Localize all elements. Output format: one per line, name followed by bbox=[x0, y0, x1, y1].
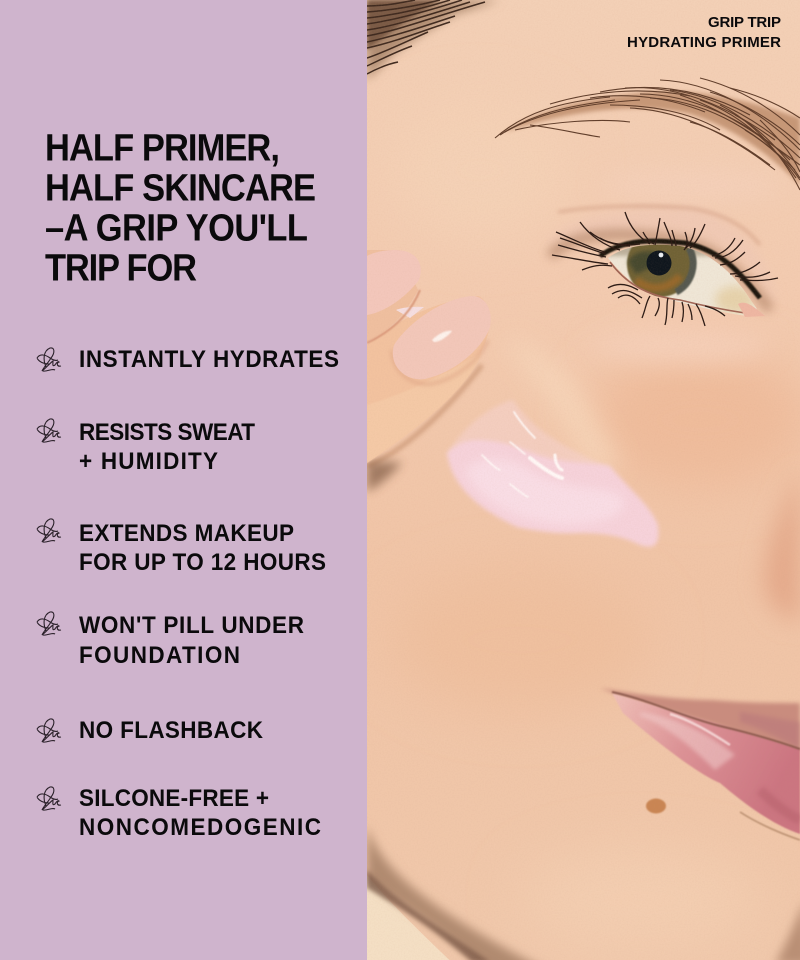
hair bbox=[367, 0, 500, 80]
benefit: resists sweat and humidity: + HUMIDITY bbox=[79, 447, 219, 474]
benefit: silicone-free: NONCOMEDOGENIC bbox=[79, 813, 321, 840]
jaw shadow and neck bbox=[367, 825, 800, 960]
heading: –A GRIP YOU'LL bbox=[45, 206, 308, 249]
benefit: resists sweat and humidity bbox=[37, 418, 255, 474]
label: product name bbox=[627, 14, 781, 51]
benefit: instantly hydrates: INSTANTLY HYDRATES bbox=[79, 345, 339, 372]
finger fold bbox=[392, 340, 488, 384]
mole bbox=[646, 798, 666, 814]
icon: signature mark bbox=[37, 348, 61, 371]
icon: signature mark bbox=[37, 787, 61, 810]
lips bbox=[600, 688, 800, 840]
nail: upper finger bbox=[367, 250, 421, 315]
primer gloss on cheek bbox=[540, 368, 616, 464]
photo: close-up of face with primer bbox=[367, 0, 800, 960]
icon: signature mark bbox=[37, 419, 61, 442]
eye bbox=[545, 206, 778, 326]
heading bbox=[45, 126, 316, 289]
icon: signature mark bbox=[37, 612, 61, 635]
heading: HALF SKINCARE bbox=[45, 166, 316, 209]
primer smear bbox=[447, 400, 658, 547]
benefit: extends makeup: EXTENDS MAKEUP bbox=[79, 519, 294, 546]
icon: signature mark bbox=[37, 719, 61, 742]
benefit: won't pill bbox=[37, 611, 304, 668]
label: product name: GRIP TRIP bbox=[708, 14, 781, 31]
benefit: silicone-free bbox=[37, 784, 321, 840]
nail: lower finger bbox=[393, 296, 491, 379]
eyebrow bbox=[495, 78, 800, 190]
hand with fingers and nails bbox=[367, 250, 491, 492]
panel: lilac benefits column bbox=[0, 0, 367, 960]
benefit: won't pill: WON'T PILL UNDER bbox=[79, 611, 304, 638]
benefit: resists sweat and humidity: RESISTS SWEAT bbox=[79, 418, 255, 445]
benefit: silicone-free: SILCONE-FREE + bbox=[79, 784, 269, 811]
benefit: extends makeup bbox=[37, 519, 326, 575]
benefit: won't pill: FOUNDATION bbox=[79, 641, 240, 668]
skin grain bbox=[367, 1, 767, 456]
icon: signature mark bbox=[37, 519, 61, 542]
heading: TRIP FOR bbox=[45, 246, 197, 289]
heading: HALF PRIMER, bbox=[45, 126, 280, 169]
nose shadow bbox=[765, 470, 800, 622]
eyelashes bbox=[552, 212, 778, 326]
benefit: extends makeup: FOR UP TO 12 HOURS bbox=[79, 548, 326, 575]
benefit: no flashback: NO FLASHBACK bbox=[79, 716, 263, 743]
label: product name: HYDRATING PRIMER bbox=[627, 34, 781, 51]
